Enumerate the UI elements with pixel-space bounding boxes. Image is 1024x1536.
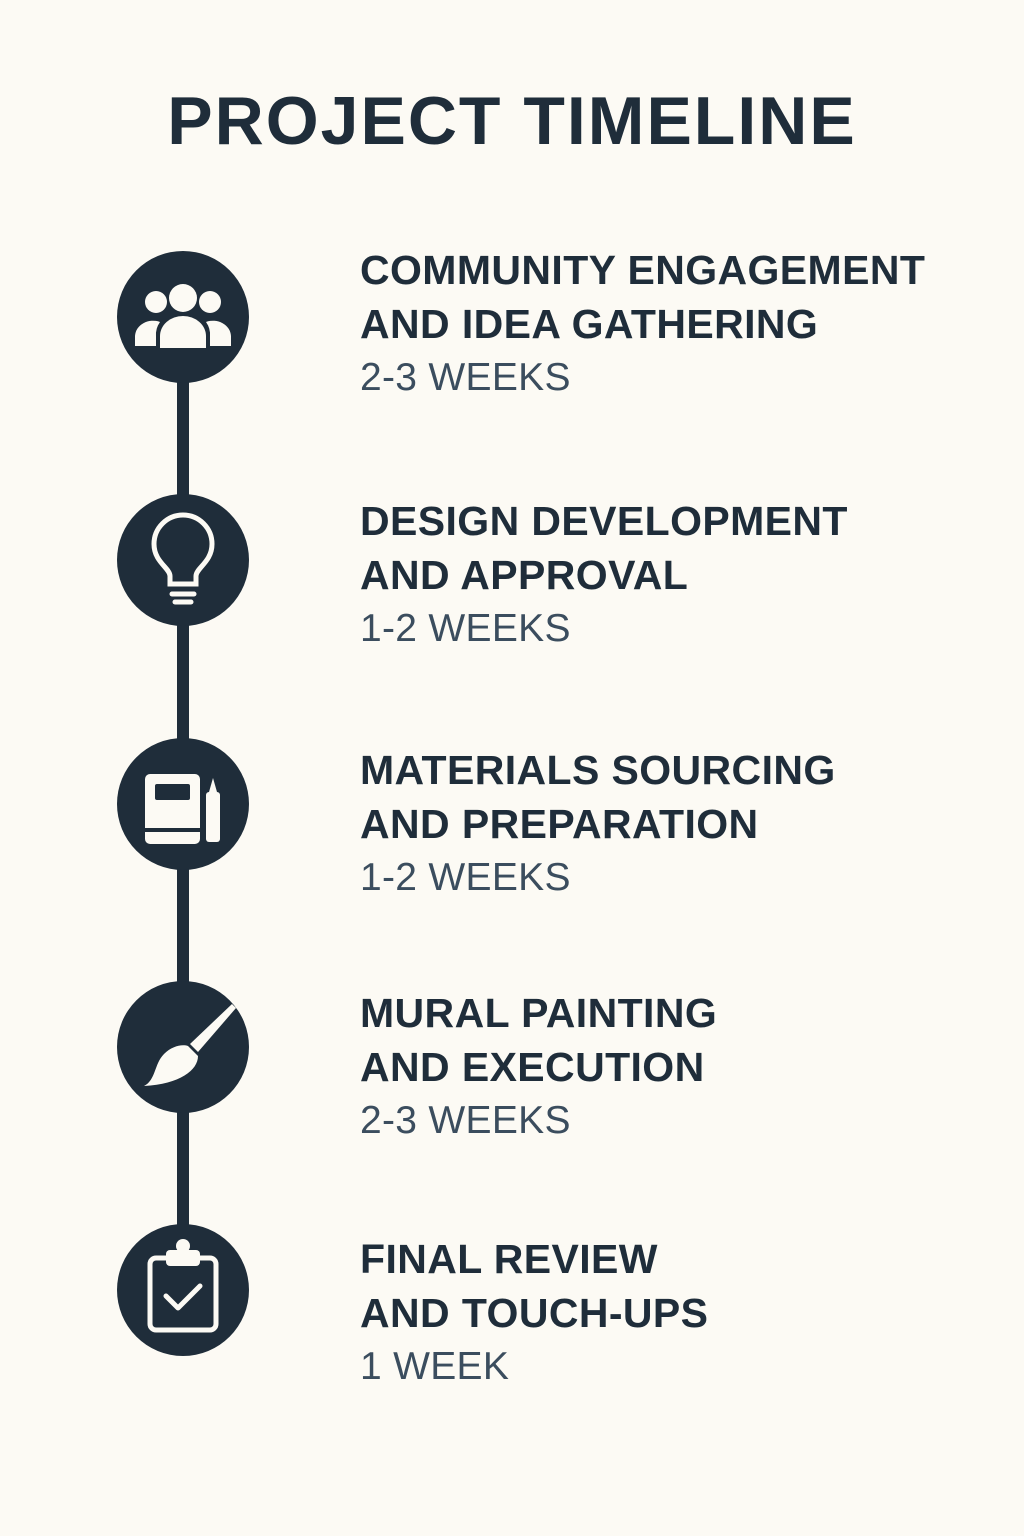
timeline graphic: [117, 251, 249, 1356]
step 4 text: AND EXECUTION: [360, 1044, 705, 1090]
icon: paintbrush: [117, 981, 249, 1113]
step 5 text: 1 WEEK: [360, 1345, 509, 1388]
step 4 text: [360, 990, 717, 1142]
connector line: [177, 317, 189, 1290]
title: PROJECT TIMELINE: [167, 83, 857, 159]
step 4 text: MURAL PAINTING: [360, 990, 717, 1036]
step 1 text: COMMUNITY ENGAGEMENT: [360, 247, 925, 293]
icon: people: [117, 251, 249, 383]
step 3 text: 1-2 WEEKS: [360, 856, 571, 899]
step 2 text: DESIGN DEVELOPMENT: [360, 498, 848, 544]
step 4 text: 2-3 WEEKS: [360, 1099, 571, 1142]
step 1 text: [360, 247, 925, 399]
step 3 text: MATERIALS SOURCING: [360, 747, 836, 793]
step 1 text: 2-3 WEEKS: [360, 356, 571, 399]
step 1 text: AND IDEA GATHERING: [360, 301, 818, 347]
step 2 text: AND APPROVAL: [360, 552, 688, 598]
step 5 text: AND TOUCH-UPS: [360, 1290, 708, 1336]
step 2 text: [360, 498, 848, 650]
step 5 text: FINAL REVIEW: [360, 1236, 658, 1282]
icon: clipboard check: [117, 1224, 249, 1356]
step 5 text: [360, 1236, 708, 1388]
icon: lightbulb: [117, 494, 249, 626]
icon: book and pencil: [117, 738, 249, 870]
step 3 text: AND PREPARATION: [360, 801, 759, 847]
step 3 text: [360, 747, 836, 899]
step 2 text: 1-2 WEEKS: [360, 607, 571, 650]
